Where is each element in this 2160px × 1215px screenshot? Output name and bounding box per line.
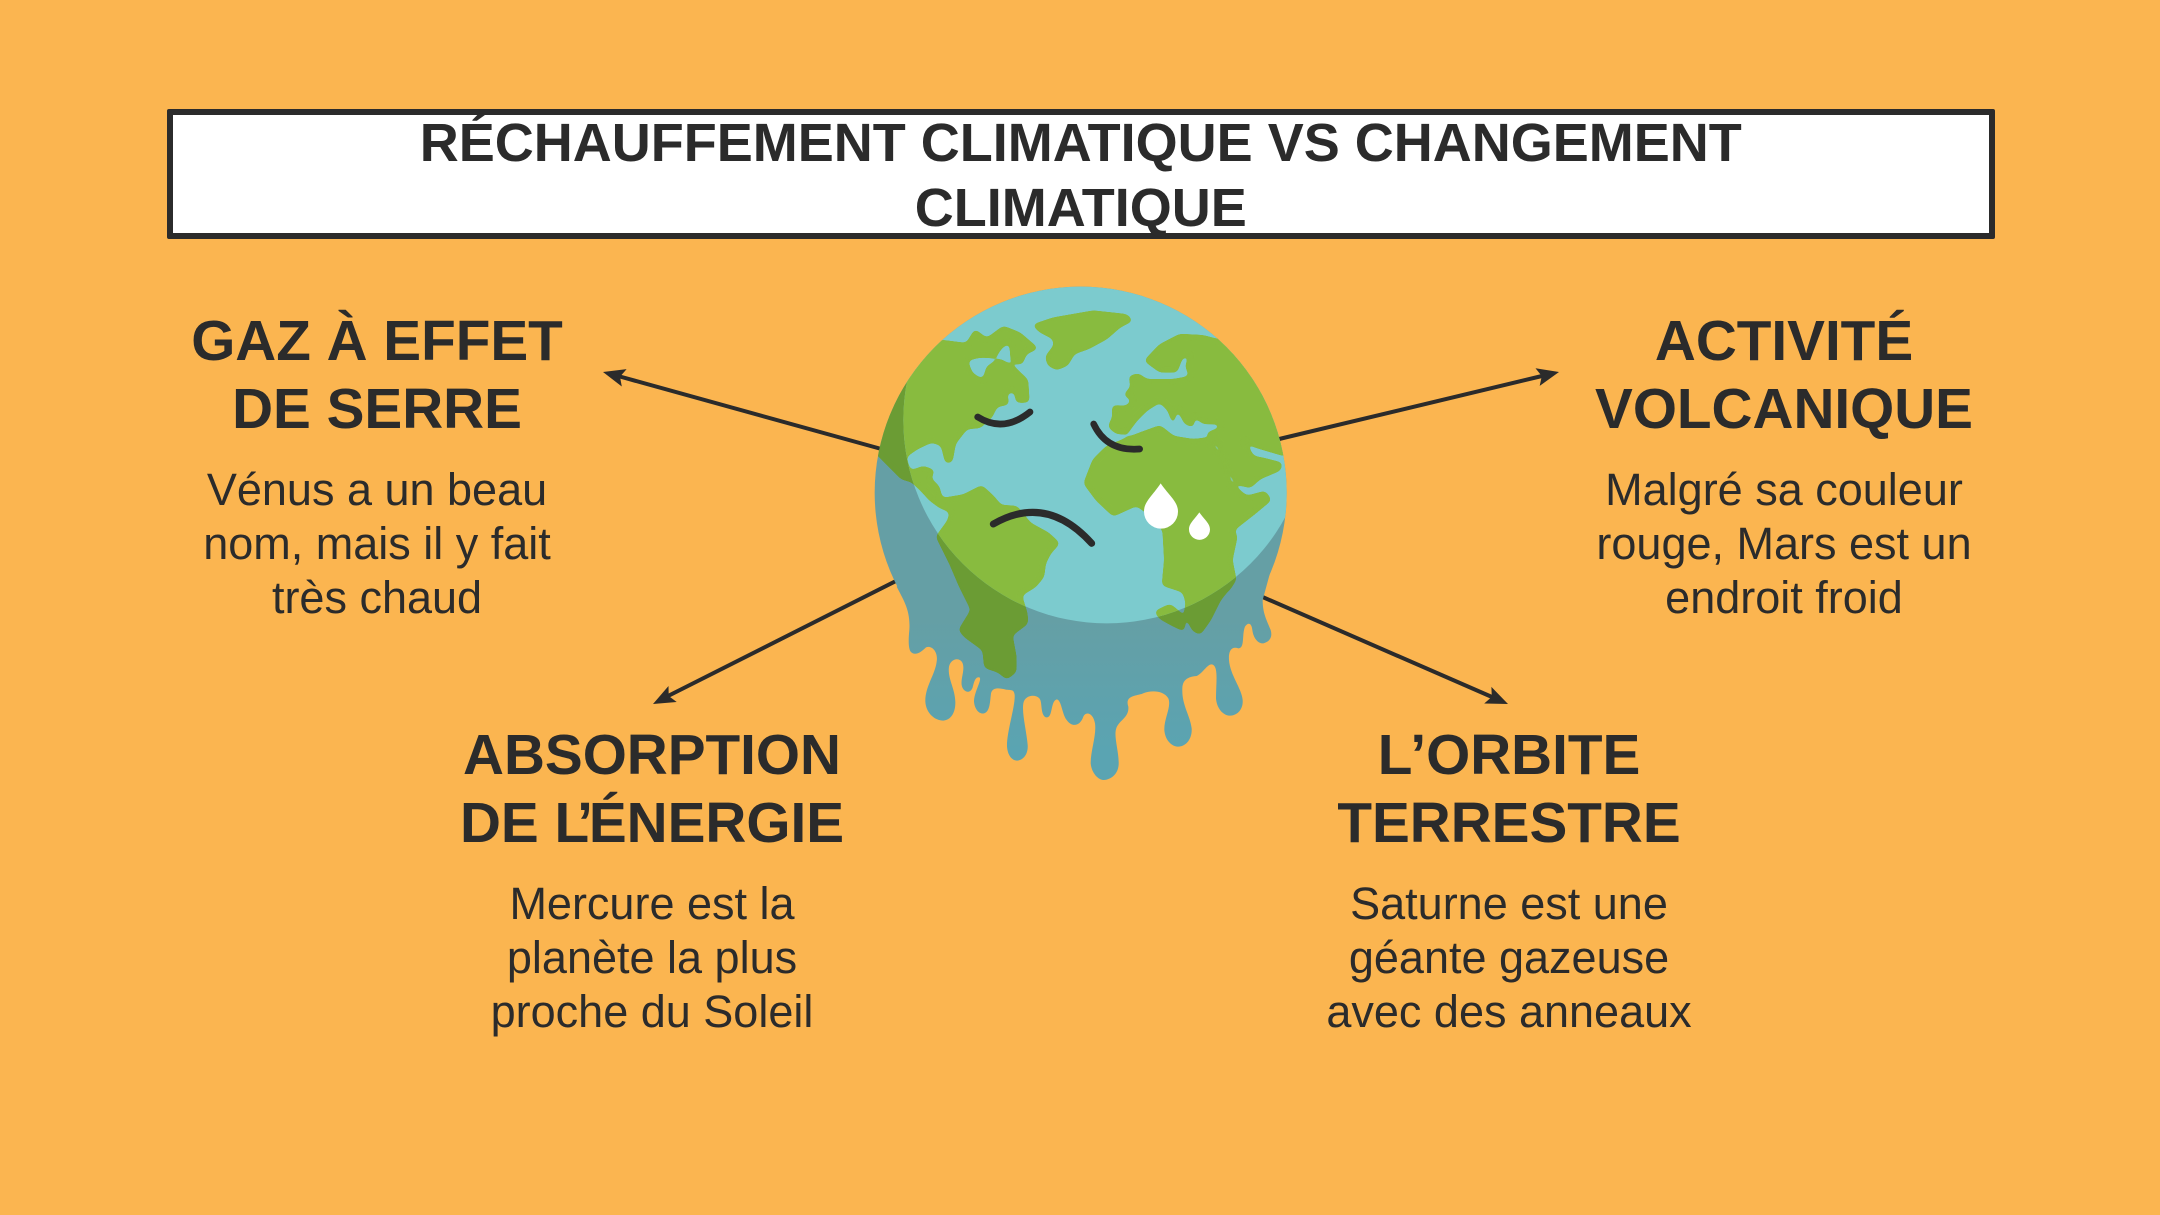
text: Mars: endroit froid bbox=[1665, 572, 1903, 623]
panel: volcanic activity bbox=[1595, 310, 1973, 623]
diagram: arrows and melting globe bbox=[603, 286, 1559, 780]
heading: energy absorption bbox=[460, 724, 844, 855]
heading: volcanic activity: ACTIVITÉ bbox=[1655, 310, 1913, 373]
text: Mercury: proche du Soleil bbox=[491, 986, 813, 1037]
arrow: towards volcanic activity bbox=[1275, 368, 1559, 440]
heading: energy absorption: DE L’ÉNERGIE bbox=[460, 792, 844, 855]
text: Mars: rouge, Mars est un bbox=[1596, 518, 1972, 569]
arrow: towards Earth orbit bbox=[1258, 595, 1508, 704]
icon: sad melting globe bbox=[874, 286, 1287, 780]
face: closed eyes and frown bbox=[978, 412, 1140, 543]
heading: Earth orbit bbox=[1337, 724, 1681, 855]
dark land in shadow bbox=[878, 338, 1284, 678]
heading: greenhouse gases: DE SERRE bbox=[232, 378, 522, 441]
panel: greenhouse gases bbox=[191, 310, 563, 623]
text: Mars: Malgré sa couleur bbox=[1605, 464, 1963, 515]
heading: volcanic activity: VOLCANIQUE bbox=[1595, 378, 1973, 441]
text: Venus: Vénus a un beau bbox=[207, 464, 547, 515]
text: Saturn: avec des anneaux bbox=[1326, 986, 1692, 1037]
globe shadow body with drips bbox=[875, 287, 1287, 780]
text: Saturn: Saturne est une bbox=[1350, 878, 1668, 929]
heading: greenhouse gases bbox=[191, 310, 563, 441]
text: Saturn bbox=[1326, 878, 1692, 1037]
arrow: towards energy absorption bbox=[653, 580, 898, 704]
text: Mercury: planète la plus bbox=[507, 932, 797, 983]
heading: greenhouse gases: GAZ À EFFET bbox=[191, 310, 563, 373]
text: Venus: très chaud bbox=[272, 572, 482, 623]
title text bbox=[420, 113, 1742, 238]
text: Mercury: Mercure est la bbox=[509, 878, 795, 929]
arrow: towards greenhouse gases bbox=[603, 369, 885, 450]
text: Saturn: géante gazeuse bbox=[1349, 932, 1669, 983]
panel: energy absorption bbox=[460, 724, 844, 1037]
text: Mercury bbox=[491, 878, 813, 1037]
heading: energy absorption: ABSORPTION bbox=[463, 724, 841, 787]
bright continents bbox=[903, 310, 1284, 617]
panel: Earth orbit bbox=[1326, 724, 1692, 1037]
text: Venus bbox=[203, 464, 551, 623]
title text: CLIMATIQUE bbox=[915, 178, 1247, 238]
heading: volcanic activity bbox=[1595, 310, 1973, 441]
title text: RÉCHAUFFEMENT CLIMATIQUE VS CHANGEMENT bbox=[420, 113, 1742, 173]
heading: Earth orbit: L’ORBITE bbox=[1378, 724, 1640, 787]
text: Venus: nom, mais il y fait bbox=[203, 518, 551, 569]
text: Mars bbox=[1596, 464, 1972, 623]
heading: Earth orbit: TERRESTRE bbox=[1337, 792, 1681, 855]
title banner bbox=[166, 109, 1995, 239]
globe lit face bbox=[903, 286, 1287, 624]
tears bbox=[1144, 483, 1210, 540]
